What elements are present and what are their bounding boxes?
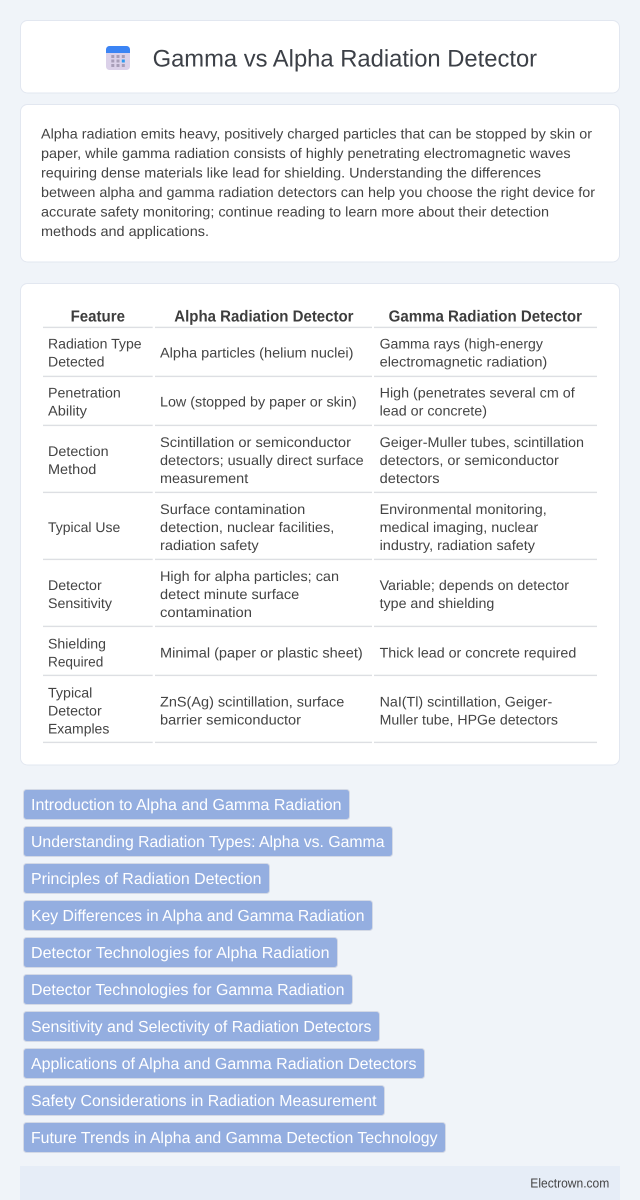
table row: detector sensitivity: Sensitivity — [48, 595, 112, 611]
table header row: Gamma Radiation Detector — [389, 309, 582, 326]
table row: radiation type detected: Radiation Type — [48, 335, 142, 351]
table row: detection method — [43, 434, 597, 493]
table row: detector sensitivity: High for alpha particles; can — [160, 568, 339, 584]
table row: typical use — [43, 501, 597, 560]
topic chip: safety: Safety Considerations in Radiation Measurement — [31, 1093, 377, 1110]
topic chip: key differences — [24, 900, 372, 930]
table row: typical detector examples: NaI(Tl) scintillation, Geiger- — [380, 693, 553, 709]
topic chip: gamma technologies — [24, 974, 352, 1004]
table row: detector sensitivity: type and shielding — [380, 595, 494, 611]
topic chip: principles — [24, 864, 270, 894]
table row: typical detector examples: Typical — [48, 684, 92, 700]
table row: radiation type detected — [43, 335, 597, 377]
topic chip: key differences: Key Differences in Alpha and Gamma Radiation — [31, 908, 364, 925]
table row: typical use: Surface contamination — [160, 501, 305, 517]
topic chip: introduction: Introduction to Alpha and Gamma Radiation — [31, 797, 342, 814]
table row: typical use: radiation safety — [160, 537, 259, 553]
footer — [20, 1166, 620, 1200]
table row: shielding required — [43, 635, 597, 676]
table row: shielding required: Minimal (paper or plastic sheet) — [160, 644, 363, 660]
table row: detector sensitivity: Detector — [48, 577, 102, 593]
table row: radiation type detected: Detected — [48, 353, 104, 369]
topic chip: radiation types — [24, 826, 392, 856]
text block: introduction paragraph: accurate safety monitoring; continue reading to learn more about their detection — [41, 204, 549, 220]
footer: Electrown.com — [530, 1175, 609, 1190]
text block: introduction paragraph: paper, while gamma radiation consists of highly penetrating electromagnetic waves — [41, 145, 571, 161]
table row: shielding required: Shielding — [48, 635, 106, 651]
table row: typical detector examples: Examples — [48, 720, 109, 736]
topic chip: sensitivity: Sensitivity and Selectivity of Radiation Detectors — [31, 1019, 372, 1036]
table row: detection method: Detection — [48, 443, 109, 459]
topic chip: applications — [24, 1048, 424, 1078]
table row: radiation type detected: electromagnetic radiation) — [380, 353, 547, 369]
topic chip: alpha technologies — [24, 938, 338, 968]
table row: typical detector examples — [43, 684, 597, 743]
table row: penetration ability: High (penetrates several cm of — [380, 384, 575, 400]
topic chip: radiation types: Understanding Radiation Types: Alpha vs. Gamma — [31, 834, 385, 851]
table header row: Feature — [71, 309, 125, 326]
topic chip: introduction — [24, 790, 350, 820]
table row: typical detector examples: ZnS(Ag) scintillation, surface — [160, 693, 345, 709]
table row: penetration ability: lead or concrete) — [380, 402, 487, 418]
table row: detection method: detectors; usually direct surface — [160, 452, 364, 468]
title: Gamma vs Alpha Radiation Detector — [153, 46, 537, 73]
table row: detector sensitivity: contamination — [160, 604, 252, 620]
topic chip: future trends — [24, 1122, 446, 1152]
text block: introduction paragraph: methods and applications. — [41, 223, 209, 239]
table row: detector sensitivity — [43, 568, 597, 627]
text block: introduction paragraph: requiring dense materials like lead for shielding. Understanding the differences — [41, 164, 541, 180]
topic list — [24, 790, 446, 1152]
table row: detection method: Scintillation or semiconductor — [160, 434, 351, 450]
topic chip: alpha technologies: Detector Technologies for Alpha Radiation — [31, 945, 330, 962]
table row: typical detector examples: Muller tube, HPGe detectors — [380, 711, 558, 727]
table header row: Alpha Radiation Detector — [174, 309, 354, 326]
text block: introduction paragraph — [41, 126, 595, 239]
table row: detection method: Method — [48, 461, 96, 477]
table header row — [43, 309, 597, 328]
table row: typical use: Typical Use — [48, 519, 121, 535]
topic chip: safety — [24, 1086, 384, 1116]
panel: comparison table — [20, 284, 620, 765]
topic chip: gamma technologies: Detector Technologies for Gamma Radiation — [31, 982, 344, 999]
table row: detector sensitivity: Variable; depends on detector — [380, 577, 569, 593]
table row: penetration ability: Penetration — [48, 384, 121, 400]
table row: shielding required: Thick lead or concrete required — [380, 644, 576, 660]
table row: typical detector examples: Detector — [48, 702, 102, 718]
table row: detection method: measurement — [160, 470, 248, 486]
table row: penetration ability: Ability — [48, 402, 87, 418]
table row: typical use: medical imaging, nuclear — [380, 519, 539, 535]
topic chip: principles: Principles of Radiation Detection — [31, 871, 262, 888]
table row: penetration ability — [43, 384, 597, 426]
table row: radiation type detected: Alpha particles (helium nuclei) — [160, 344, 354, 360]
topic chip: sensitivity — [24, 1012, 380, 1042]
table row: radiation type detected: Gamma rays (high-energy — [380, 335, 543, 351]
topic chip: future trends: Future Trends in Alpha and Gamma Detection Technology — [31, 1130, 438, 1147]
text block: introduction paragraph: Alpha radiation emits heavy, positively charged particles that can be stopped by skin or — [41, 126, 592, 142]
table row: shielding required: Required — [48, 653, 103, 669]
table row: detector sensitivity: detect minute surface — [160, 586, 300, 602]
table row: typical use: industry, radiation safety — [380, 537, 535, 553]
table row: penetration ability: Low (stopped by paper or skin) — [160, 393, 357, 409]
panel: header — [20, 20, 620, 93]
table row: detection method: Geiger-Muller tubes, scintillation — [380, 434, 584, 450]
table row: typical use: Environmental monitoring, — [380, 501, 547, 517]
table row: detection method: detectors, or semiconductor — [380, 452, 559, 468]
icon: calendar — [106, 46, 130, 70]
panel: introduction — [20, 104, 620, 262]
text block: introduction paragraph: between alpha and gamma radiation detectors can help you choose the right device for — [41, 184, 595, 200]
table row: typical use: detection, nuclear facilities, — [160, 519, 334, 535]
table row: typical detector examples: barrier semiconductor — [160, 711, 301, 727]
topic chip: applications: Applications of Alpha and Gamma Radiation Detectors — [31, 1056, 416, 1073]
table row: detection method: detectors — [380, 470, 440, 486]
